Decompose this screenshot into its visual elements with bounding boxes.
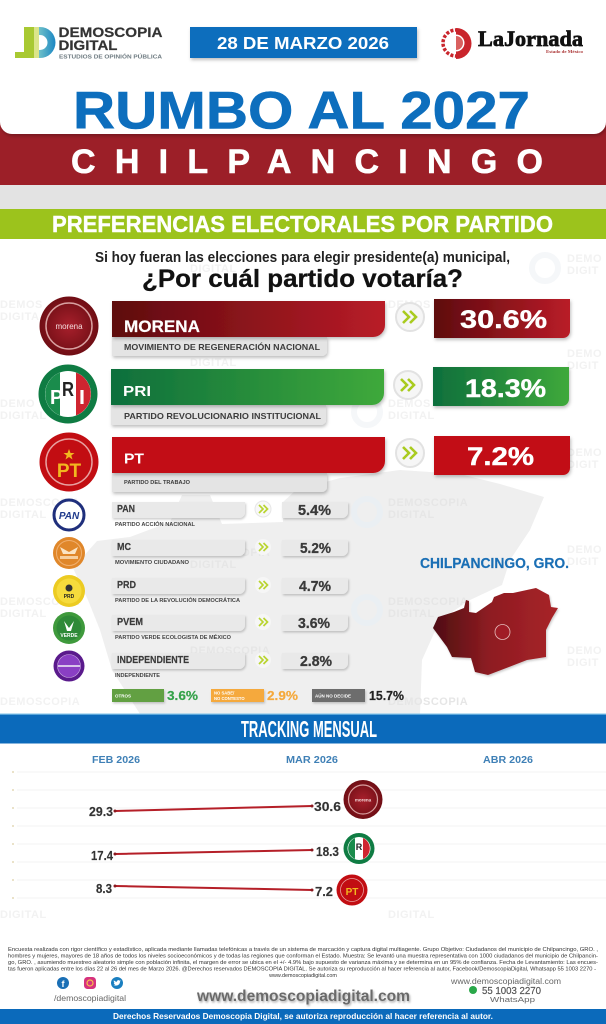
icon: PAN logo xyxy=(54,500,84,530)
month labels: ABR 2026 xyxy=(483,754,533,766)
logo: La Jornada: LaJornada xyxy=(478,26,583,51)
bottom bar xyxy=(0,1009,606,1024)
icon: morena logo xyxy=(40,296,98,356)
watermarks: DIGITAL xyxy=(0,608,47,620)
legend: otros xyxy=(112,689,198,703)
bar with label: MC xyxy=(117,541,131,553)
bar with label xyxy=(112,653,245,669)
green section heading: PREFERENCIAS ELECTORALES POR PARTIDO xyxy=(52,211,553,237)
legend: no sabe xyxy=(211,689,298,703)
logo: La Jornada xyxy=(443,26,583,59)
series: morena: 29.3 xyxy=(89,804,113,819)
logo: Demoscopia Digital xyxy=(15,25,163,60)
watermarks: DEMO xyxy=(567,447,602,459)
subtitle: city: CHILPANCINGO xyxy=(71,143,543,181)
sub label xyxy=(111,405,326,425)
value: 5.4% xyxy=(298,503,331,519)
background map of Guerrero xyxy=(73,470,544,714)
month labels: FEB 2026 xyxy=(92,754,140,766)
icon: PT logo xyxy=(40,432,98,492)
value: 4.7% xyxy=(299,579,331,595)
watermarks: DEMOSCOPIA xyxy=(388,696,468,708)
watermarks: DEMOSCOPIA xyxy=(0,596,80,608)
icon: PVEM logo: VERDE xyxy=(60,633,78,639)
row: INDEPENDIENTE xyxy=(54,650,348,682)
bar with label: PAN xyxy=(117,503,135,515)
watermarks: DIGITAL xyxy=(190,559,237,571)
sub label: PARTIDO REVOLUCIONARIO INSTITUCIONAL xyxy=(124,411,321,421)
icon: facebook: f xyxy=(62,979,66,989)
watermarks: DIGITAL xyxy=(388,608,435,620)
value: 30.6% xyxy=(460,306,547,334)
watermarks: DEMOS xyxy=(388,299,431,311)
series: PT: PT xyxy=(346,887,358,898)
series: PRI: 18.3 xyxy=(316,844,339,859)
watermarks: DEMOSCOPIA xyxy=(0,696,80,708)
watermarks: DIGITAL xyxy=(0,410,47,422)
icon: PT logo: PT xyxy=(57,461,82,482)
icon: MC logo xyxy=(53,537,85,569)
watermarks: DIGITAL xyxy=(190,357,237,369)
watermarks: DIGITAL xyxy=(0,909,47,921)
watermarks: DEMO xyxy=(567,51,602,63)
legend: aun no decide: AÚN NO DECIDE xyxy=(315,692,351,698)
disclaimer text: hombres y mujeres, mayores de 18 años de todos los niveles socioeconómicos y de todas las regiones que conforman el Estado. Muestra: Se levantó una muestra representativa con 1000 ciudadanos del municipio de Chilpancin- xyxy=(8,954,598,960)
icon: PRI logo: I xyxy=(79,387,85,409)
value: 2.8% xyxy=(300,654,332,670)
disclaimer text: www.demoscopiadigital.com xyxy=(268,973,337,979)
watermarks: DEMO xyxy=(567,544,602,556)
map label: CHILPANCINGO, GRO. xyxy=(420,556,569,572)
series: PRI: R xyxy=(356,842,363,852)
row: PRD xyxy=(53,575,348,607)
sub label: PARTIDO DEL TRABAJO xyxy=(124,480,191,486)
watermarks: DEMOSCOPIA xyxy=(388,4,468,16)
watermarks: DEMOS xyxy=(0,299,43,311)
sub label: PARTIDO VERDE ECOLOGISTA DE MÉXICO xyxy=(115,633,232,641)
value: 5.2% xyxy=(300,541,331,557)
series: PRI xyxy=(91,833,374,864)
watermarks: DEMO xyxy=(567,645,602,657)
watermarks: DIGITAL xyxy=(190,61,237,73)
bar with label xyxy=(112,615,245,631)
bar: PRI xyxy=(123,383,151,400)
watermarks: DIGIT xyxy=(567,556,599,568)
value xyxy=(282,578,348,595)
watermarks: DEMOSCOPIA xyxy=(0,497,80,509)
series: PT xyxy=(96,874,368,906)
value xyxy=(282,615,348,632)
arrow xyxy=(255,614,271,630)
bar with label xyxy=(112,578,245,594)
watermarks: DIGITAL xyxy=(388,410,435,422)
icon: PVEM logo xyxy=(53,612,85,644)
gray band xyxy=(0,185,606,209)
sub label: PARTIDO ACCIÓN NACIONAL xyxy=(115,520,196,528)
watermarks: DIGIT xyxy=(567,459,599,471)
series: PT: 7.2 xyxy=(315,884,333,899)
value xyxy=(433,367,569,406)
legend: otros: 3.6% xyxy=(167,689,198,703)
arrow xyxy=(255,577,271,593)
watermarks: DIGITA xyxy=(0,311,39,323)
disclaimer text xyxy=(8,947,599,979)
value: 18.3% xyxy=(465,375,546,403)
series: PRI: 17.4 xyxy=(91,848,114,863)
icon: PAN logo: PAN xyxy=(59,511,80,522)
row: PRI xyxy=(38,364,569,425)
watermarks: DEMO xyxy=(567,253,602,265)
logo: Demoscopia Digital: ESTUDIOS DE OPINIÓN PÚBLICA xyxy=(59,52,162,60)
month labels xyxy=(92,754,533,766)
watermarks: DEMOSCOPIA xyxy=(388,596,468,608)
bar xyxy=(112,437,385,473)
map: Chilpancingo municipality xyxy=(433,588,558,675)
bar: MORENA xyxy=(124,317,200,336)
bar xyxy=(111,369,384,405)
logo: La Jornada: Estado de México xyxy=(546,50,583,54)
red title band xyxy=(0,122,606,185)
bar: PT xyxy=(124,450,144,468)
icon: independent logo xyxy=(54,650,84,682)
bar with label: INDEPENDIENTE xyxy=(117,654,189,666)
arrow xyxy=(255,652,271,668)
arrow xyxy=(255,539,271,555)
tracking heading: TRACKING MENSUAL xyxy=(241,716,377,742)
value xyxy=(282,540,348,557)
social icons xyxy=(54,977,126,1003)
watermarks: DEMO xyxy=(567,348,602,360)
watermarks: DEMOSCOPIA xyxy=(190,547,270,559)
bar with label xyxy=(112,540,245,556)
icon: PRD logo xyxy=(53,575,85,607)
logo: Demoscopia Digital: DEMOSCOPIA xyxy=(58,25,163,40)
icon: whatsapp xyxy=(469,986,477,994)
watermarks: DIGIT xyxy=(567,265,599,277)
sub label: MOVIMIENTO CIUDADANO xyxy=(115,560,190,566)
question text: Si hoy fueran las elecciones para elegir presidente(a) municipal, xyxy=(95,250,510,266)
arrow xyxy=(394,371,422,399)
watermarks: DEMOS xyxy=(388,398,431,410)
arrow xyxy=(255,501,271,517)
legend: no sabe: NO SABE/ xyxy=(214,690,235,696)
contact: WhatsApp xyxy=(490,995,535,1004)
tracking heading xyxy=(0,714,606,744)
sub label xyxy=(112,473,327,492)
date box: 28 DE MARZO 2026 xyxy=(217,33,389,53)
value: 3.6% xyxy=(298,616,330,632)
watermarks: DEMOSCOPIA xyxy=(0,4,80,16)
watermarks: DIGIT xyxy=(567,63,599,75)
handle: /demoscopiadigital xyxy=(54,993,126,1003)
legend: aun no decide xyxy=(312,689,404,703)
line chart xyxy=(12,771,606,906)
row: PVEM xyxy=(53,612,348,644)
bar xyxy=(112,301,385,337)
legend: no sabe: NO CONTESTO xyxy=(214,696,245,701)
sub label xyxy=(112,337,327,356)
watermarks: DIGITAL xyxy=(0,15,47,27)
question text: ¿Por cuál partido votaría? xyxy=(142,265,463,293)
disclaimer text: go, GRO. , asumiendo muestreo aleatorio simple con población infinita, el margen de error se ubica en el +/- 4.9% bajo supuesto de varianza máxima y se determina en un 95% de confianza. Fecha de Levantamiento: Las encues- xyxy=(8,960,598,966)
watermarks: DEMO xyxy=(0,398,35,410)
watermarks: DIGITAL xyxy=(388,909,435,921)
icon: PRD logo: PRD xyxy=(64,594,75,600)
disclaimer text: tas fueron aplicadas entre los días 22 al 26 del mes de Marzo 2026. @Derechos reservados DEMOSCOPIA DIGITAL. Se autoriza su reproducción al hacer referencia al autor, Facebook/DemoscopiaDigital, Whatsapp 55 1003 2270 - xyxy=(8,966,596,972)
bar with label xyxy=(112,502,245,518)
watermarks: DEMOSCOPIA xyxy=(190,645,270,657)
icon: La Jornada sun xyxy=(443,28,471,59)
row: MC xyxy=(53,537,348,569)
icon: morena logo: morena xyxy=(55,322,83,331)
website: www.demoscopiadigital.com xyxy=(196,988,410,1005)
contact xyxy=(450,977,561,1004)
legend: otros: OTROS xyxy=(115,694,131,698)
value: 7.2% xyxy=(467,443,534,471)
series: morena: morena xyxy=(355,798,372,802)
icon: twitter xyxy=(111,977,123,989)
month labels: MAR 2026 xyxy=(286,754,338,766)
icon: PRI logo xyxy=(38,364,98,424)
icon: PRI logo: P xyxy=(50,387,63,409)
contact: 55 1003 2270 xyxy=(482,985,541,997)
watermarks: DIGITAL xyxy=(0,509,47,521)
arrow xyxy=(396,303,424,331)
watermarks: DEMOSCOPIA xyxy=(388,497,468,509)
value xyxy=(282,502,348,519)
value xyxy=(434,299,570,338)
bottom bar: Derechos Reservados Demoscopia Digital, se autoriza reproducción al hacer referencia al autor. xyxy=(113,1012,493,1021)
date box xyxy=(190,27,417,58)
question text xyxy=(95,250,510,293)
bar with label: PVEM xyxy=(117,616,143,628)
sub label: PARTIDO DE LA REVOLUCIÓN DEMOCRÁTICA xyxy=(115,596,240,604)
legend: aun no decide: 15.7% xyxy=(369,689,404,703)
white header panel xyxy=(0,0,606,134)
watermarks: DIGITAL xyxy=(388,15,435,27)
disclaimer text: Encuesta realizada con rigor científico y estadístico, aplicada mediante llamadas telefónicas a través de un sistema de marcación y captura digital multiagente. Grupo Objetivo: Ciudadanos del municipio de Chilpancingo, GRO. , xyxy=(8,947,599,953)
title: RUMBO AL 2027 xyxy=(73,82,530,140)
row: PAN xyxy=(54,500,348,530)
watermarks: DIGITAL xyxy=(190,263,237,275)
series: morena: 30.6 xyxy=(314,799,341,814)
icon: PRI logo: R xyxy=(62,379,74,401)
icon: instagram xyxy=(84,977,96,989)
series: PT: 8.3 xyxy=(96,881,112,896)
sub label: MOVIMIENTO DE REGENERACIÓN NACIONAL xyxy=(124,341,320,352)
sub label: INDEPENDIENTE xyxy=(115,673,160,679)
watermarks: DIGITAL xyxy=(388,509,435,521)
watermarks: DIGIT xyxy=(567,657,599,669)
series: morena xyxy=(89,780,382,819)
logo: Demoscopia Digital: DIGITAL xyxy=(58,38,118,53)
row: PT xyxy=(40,432,570,492)
watermarks: DIGIT xyxy=(567,360,599,372)
value xyxy=(434,436,570,475)
icon: D mark xyxy=(15,27,55,58)
contact: www.demoscopiadigital.com xyxy=(450,977,561,986)
row: MORENA xyxy=(40,296,570,356)
value xyxy=(282,653,348,670)
arrow xyxy=(396,439,424,467)
bar with label: PRD xyxy=(117,579,136,591)
legend: no sabe: 2.9% xyxy=(267,689,298,703)
